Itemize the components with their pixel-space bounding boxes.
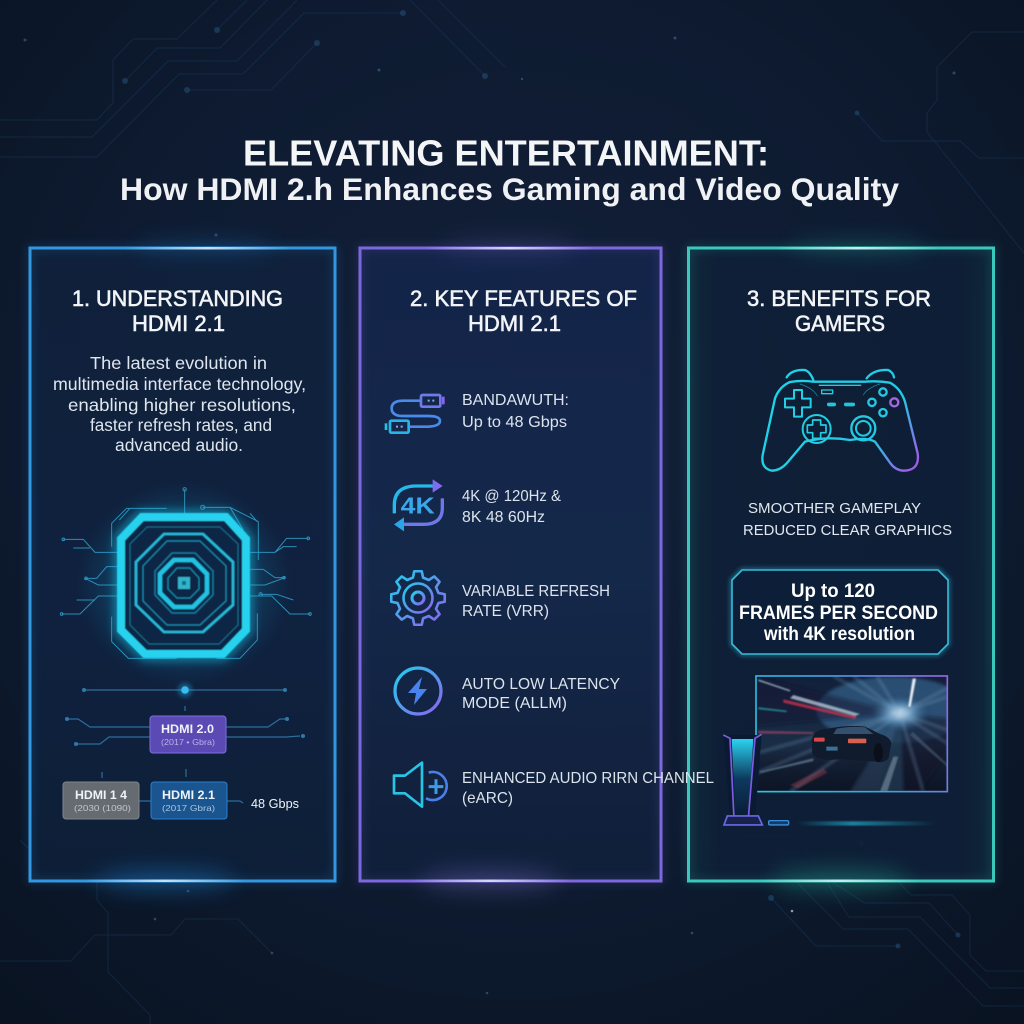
icon: cable	[386, 395, 443, 433]
icon: gear	[391, 571, 445, 625]
box: HDMI 2.1	[151, 782, 227, 819]
panel: benefits for gamers	[688, 240, 994, 890]
box: HDMI 1.4: (2030 (1090)	[74, 803, 131, 813]
heading: understanding: HDMI 2.1	[132, 311, 225, 336]
callout: 120 frames per second: with 4K resolution	[763, 623, 915, 645]
title: ELEVATING ENTERTAINMENT:	[243, 132, 769, 174]
feature: 4K 8K	[394, 479, 561, 531]
feature: variable refresh rate: VARIABLE REFRESH	[462, 583, 610, 600]
callout: 120 frames per second: FRAMES PER SECOND	[739, 602, 938, 624]
box: HDMI 1.4	[63, 782, 139, 819]
feature: variable refresh rate: RATE (VRR)	[462, 603, 549, 620]
icon: HDMI chip	[60, 482, 311, 686]
box: HDMI 2.1: (2017 Gbra)	[162, 803, 215, 813]
icon: speaker plus	[394, 763, 447, 807]
feature: auto low latency: MODE (ALLM)	[462, 695, 567, 712]
benefit text: SMOOTHER GAMEPLAY	[748, 500, 921, 517]
title	[120, 132, 899, 207]
intro text: The latest evolution in	[90, 353, 267, 373]
icon: game controller	[762, 370, 918, 471]
intro text: faster refresh rates, and	[90, 415, 272, 435]
monitor with racing game scene	[723, 676, 970, 826]
intro text: multimedia interface technology,	[53, 374, 306, 394]
icon: lightning bolt	[395, 668, 441, 714]
panel: key features	[360, 240, 714, 890]
callout: 120 frames per second	[732, 570, 948, 654]
heading: key features	[410, 286, 637, 336]
box: HDMI 2.0: (2017 • Gbra)	[161, 737, 215, 747]
intro text: enabling higher resolutions,	[68, 395, 296, 415]
heading: key features: HDMI 2.1	[468, 311, 561, 336]
heading: benefits: 3. BENEFITS FOR	[747, 286, 931, 311]
benefit text: REDUCED CLEAR GRAPHICS	[743, 522, 952, 539]
heading: understanding	[72, 286, 283, 336]
heading: understanding: 1. UNDERSTANDING	[72, 286, 283, 311]
feature: 4K 8K: 8K 48 60Hz	[462, 509, 545, 526]
feature: auto low latency: AUTO LOW LATENCY	[462, 676, 620, 693]
feature: bandwidth: BANDAWUTH:	[462, 392, 569, 409]
version timeline	[63, 683, 305, 819]
box: HDMI 2.0	[150, 716, 226, 753]
benefit text	[743, 500, 952, 539]
box: HDMI 2.0: HDMI 2.0	[161, 724, 214, 736]
feature: 4K 8K: 4K @ 120Hz &	[462, 488, 561, 505]
title: How HDMI 2.h Enhances Gaming and Video Quality	[120, 171, 899, 207]
feature: enhanced audio return channel	[394, 763, 714, 807]
box: HDMI 1.4: HDMI 1 4	[75, 790, 128, 802]
icon: 4K arrows	[394, 479, 443, 531]
box: HDMI 2.1: HDMI 2.1	[162, 790, 216, 802]
intro text	[53, 353, 306, 455]
label: 48 Gbps: 48 Gbps	[251, 797, 299, 811]
heading: key features: 2. KEY FEATURES OF	[410, 286, 637, 311]
feature: bandwidth: Up to 48 Gbps	[462, 414, 567, 431]
intro text: advanced audio.	[115, 435, 243, 455]
feature: enhanced audio return channel: (eARC)	[462, 790, 513, 807]
feature: enhanced audio return channel: ENHANCED AUDIO RIRN CHANNEL	[462, 770, 714, 787]
feature: auto low latency	[395, 668, 620, 714]
feature: bandwidth	[386, 392, 569, 433]
heading: benefits	[747, 286, 931, 336]
panel: understanding HDMI 2.1	[30, 240, 335, 890]
heading: benefits: GAMERS	[795, 311, 885, 336]
game console	[723, 734, 789, 825]
callout: 120 frames per second: Up to 120	[791, 580, 875, 602]
icon: 4K arrows: 4K	[401, 492, 435, 518]
feature: variable refresh rate	[391, 571, 610, 625]
